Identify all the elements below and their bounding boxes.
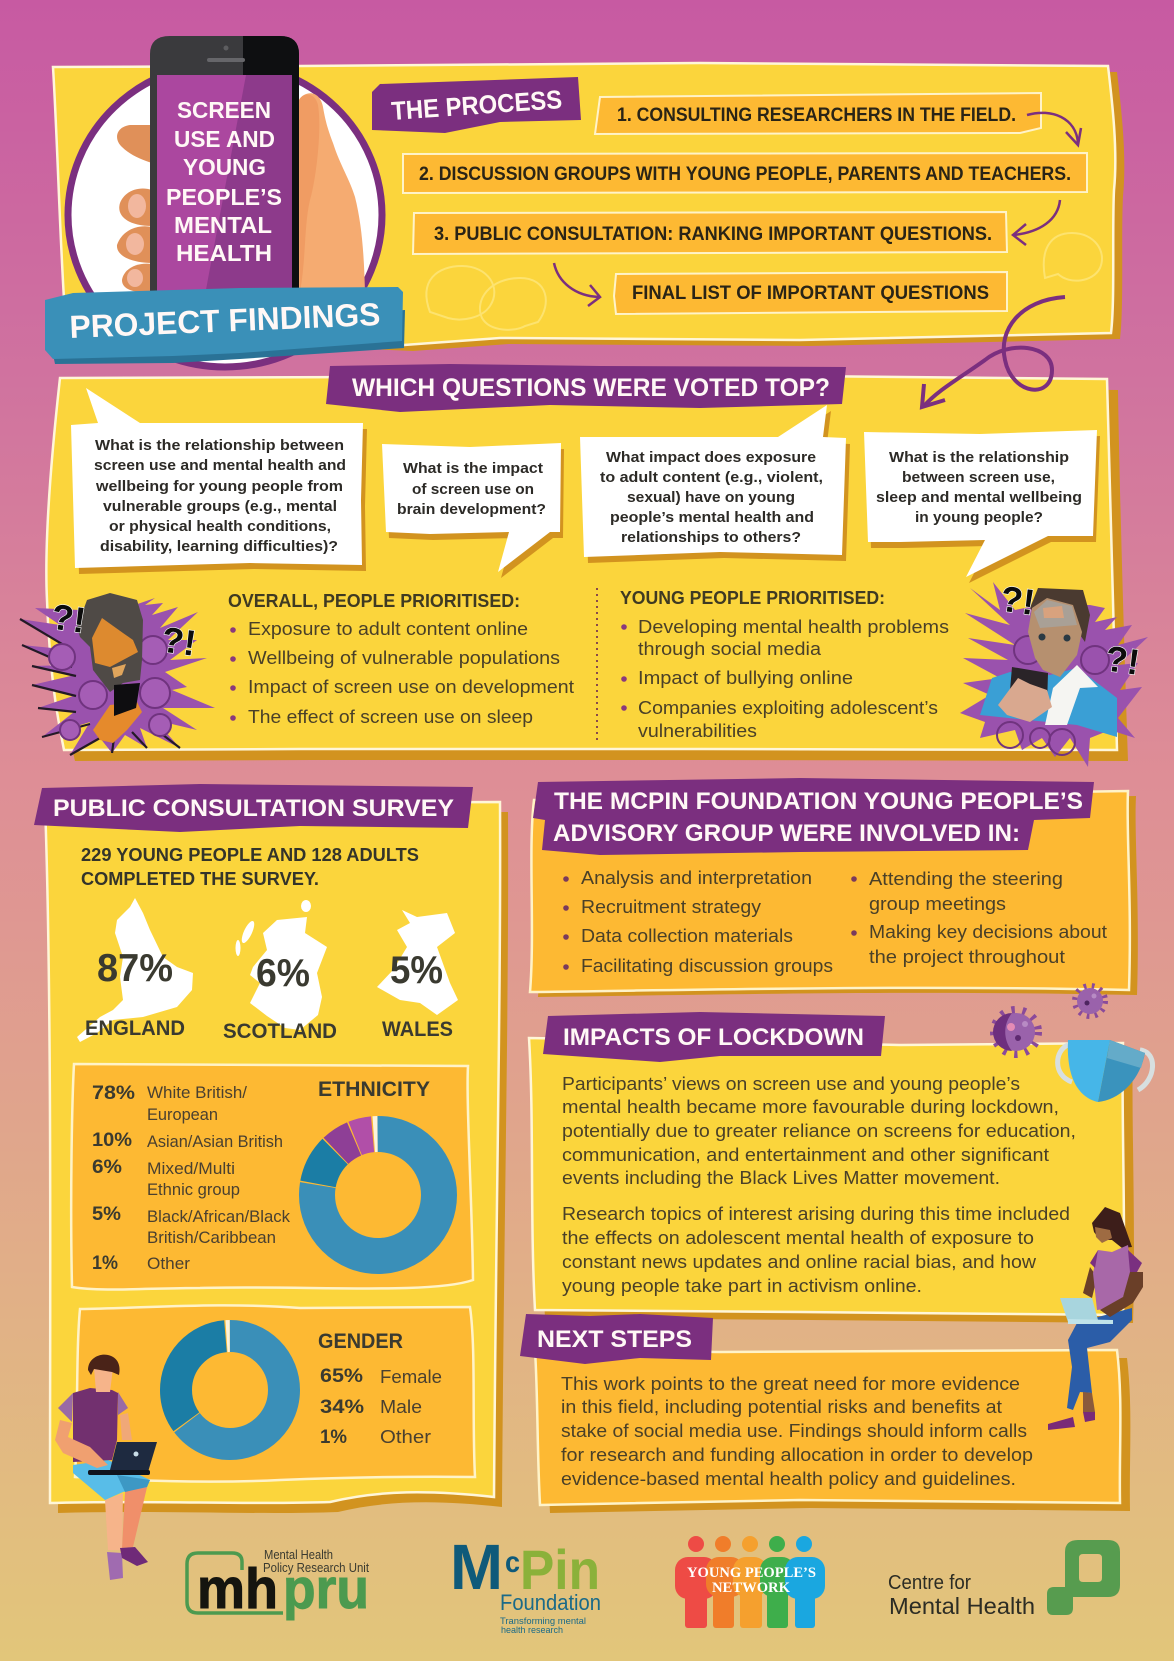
- text: lockdown findings: the effects on adolescent mental health of exposure to: [562, 1227, 1034, 1248]
- ethnicity legend: Black/African/Black: [147, 1208, 291, 1226]
- step 3: 3. PUBLIC CONSULTATION: RANKING IMPORTANT QUESTIONS.: [434, 224, 992, 245]
- illustration: shocked woman with phone: [960, 582, 1148, 767]
- text: lockdown findings: potentially due to greater reliance on screens for education,: [562, 1120, 1076, 1141]
- text: next steps: stake of social media use. Findings should inform calls: [561, 1420, 1027, 1441]
- heading: next steps: [520, 1314, 713, 1364]
- step 2: [403, 153, 1087, 193]
- text: lockdown findings: constant news updates and online racial bias, and how: [562, 1251, 1037, 1272]
- list: young people priorities: Developing mental health problems: [638, 616, 949, 637]
- speech bubble: brain development: What is the impact: [403, 460, 543, 477]
- ethnicity legend: 78%: [92, 1083, 135, 1104]
- question marks left: ?!: [49, 596, 88, 641]
- logo: mcpin foundation: M: [450, 1531, 503, 1603]
- text: next steps: This work points to the great need for more evidence: [561, 1373, 1020, 1394]
- list: young people priorities: vulnerabilities: [638, 720, 757, 741]
- speech bubble: brain development: of screen use on: [412, 481, 534, 498]
- text: next steps: [561, 1373, 1033, 1489]
- title: MENTAL: [174, 212, 272, 238]
- panel: the process: [53, 63, 1124, 351]
- heading: public consultation survey: PUBLIC CONSULTATION SURVEY: [53, 795, 454, 822]
- illustration: phone held in hand: [68, 36, 382, 367]
- list: young people priorities: [621, 616, 949, 741]
- logo: mcpin foundation: Foundation: [500, 1590, 601, 1615]
- text: survey respondents: 229 YOUNG PEOPLE AND 128 ADULTS: [81, 845, 419, 865]
- icon: face mask: [1058, 1040, 1153, 1102]
- map: england: 87%: [97, 947, 173, 990]
- list: advisory group left: Facilitating discussion groups: [581, 955, 833, 976]
- list: advisory group left: [563, 867, 833, 976]
- map: scotland: [223, 900, 337, 1043]
- logo: mhpru: Policy Research Unit: [263, 1561, 369, 1575]
- speech bubble: vulnerable groups: screen use and mental health and: [94, 457, 346, 474]
- text: lockdown findings: Participants’ views on screen use and young people’s: [562, 1073, 1020, 1094]
- heading: advisory group: [533, 778, 1094, 855]
- text: survey respondents: [81, 845, 419, 889]
- final list: FINAL LIST OF IMPORTANT QUESTIONS: [632, 283, 989, 304]
- map: england: ENGLAND: [85, 1017, 185, 1040]
- text: lockdown findings: communication, and entertainment and other significant: [562, 1144, 1049, 1165]
- final list: [614, 272, 1007, 314]
- ethnicity legend: White British/: [147, 1084, 247, 1102]
- list: advisory group left: Data collection materials: [581, 925, 793, 946]
- logo: young people's network: [675, 1536, 825, 1628]
- gender legend: Male: [380, 1397, 422, 1417]
- donut chart: ethnicity: [317, 1134, 439, 1256]
- question marks left: ?!: [159, 619, 199, 664]
- logo: mhpru: Mental Health: [264, 1548, 333, 1562]
- list: advisory group right: Making key decisions about: [869, 921, 1107, 942]
- ethnicity legend: 6%: [92, 1157, 122, 1178]
- panel: public consultation survey: [45, 802, 508, 1513]
- speech bubble: adult content: What impact does exposure: [606, 449, 816, 466]
- speech bubble: adult content: [580, 405, 850, 563]
- text: lockdown findings: young people take part in activism online.: [562, 1275, 922, 1296]
- heading: the process: [372, 77, 581, 133]
- illustration: shocked man with phone: [20, 593, 215, 755]
- panel: impacts of lockdown: [529, 1038, 1134, 1323]
- list: overall priorities: The effect of screen use on sleep: [248, 706, 533, 727]
- step 2: 2. DISCUSSION GROUPS WITH YOUNG PEOPLE, PARENTS AND TEACHERS.: [419, 164, 1071, 185]
- heading: public consultation survey: [34, 784, 473, 832]
- panel: gender: [75, 1305, 475, 1482]
- illustration: man with laptop: [55, 1355, 157, 1580]
- list: overall priorities: Impact of screen use on development: [248, 676, 574, 697]
- panel: ethnicity: [71, 1064, 473, 1290]
- logo: mhpru: [187, 1548, 369, 1621]
- icon: thumb: [299, 93, 365, 292]
- speech bubble: brain development: [382, 443, 564, 578]
- icon: fingers: [117, 125, 152, 293]
- ethnicity legend: Asian/Asian British: [147, 1133, 283, 1151]
- speech bubble: vulnerable groups: or physical health conditions,: [109, 518, 331, 535]
- arrow: step 2 to step 3: [1013, 200, 1060, 245]
- title: PEOPLE’S: [166, 184, 282, 210]
- step 3: [413, 212, 1007, 254]
- logo: mcpin foundation: [450, 1531, 601, 1636]
- logo: young people's network: NETWORK: [712, 1580, 790, 1596]
- list: advisory group left: Recruitment strategy: [581, 896, 762, 917]
- ethnicity legend: 10%: [92, 1130, 132, 1151]
- panel: next steps: [535, 1350, 1130, 1513]
- ethnicity legend: British/Caribbean: [147, 1229, 276, 1247]
- donut chart: gender: [176, 1336, 284, 1444]
- heading: overall priorities: OVERALL, PEOPLE PRIORITISED:: [228, 591, 520, 611]
- heading: which questions were voted top: [326, 364, 846, 412]
- heading: the process: THE PROCESS: [390, 84, 563, 126]
- speech bubble: adult content: people’s mental health and: [610, 509, 814, 526]
- logo: mcpin foundation: Transforming mental: [500, 1616, 586, 1627]
- speech bubble: brain development: brain development?: [397, 501, 546, 518]
- list: advisory group right: Attending the steering: [869, 868, 1063, 889]
- speech bubble: sleep: in young people?: [915, 509, 1043, 526]
- heading: which questions were voted top: WHICH QUESTIONS WERE VOTED TOP?: [352, 374, 830, 402]
- ethnicity legend: [92, 1083, 291, 1274]
- list: young people priorities: Companies exploiting adolescent’s: [638, 697, 938, 718]
- list: advisory group left: Analysis and interpretation: [581, 867, 812, 888]
- speech bubble: vulnerable groups: What is the relationship between: [95, 437, 344, 454]
- illustration: woman with laptop: [1048, 1207, 1143, 1430]
- list: advisory group right: [851, 868, 1107, 967]
- step 1: 1. CONSULTING RESEARCHERS IN THE FIELD.: [617, 105, 1016, 126]
- text: next steps: in this field, including potential risks and benefits at: [561, 1396, 1002, 1417]
- text: survey respondents: COMPLETED THE SURVEY.: [81, 869, 319, 889]
- panel: advisory group: [530, 791, 1138, 997]
- text: next steps: for research and funding allocation in order to develop: [561, 1444, 1033, 1465]
- speech bubble: adult content: relationships to others?: [621, 529, 801, 546]
- heading: ethnicity: ETHNICITY: [318, 1078, 430, 1101]
- heading: advisory group: ADVISORY GROUP WERE INVOLVED IN:: [553, 820, 1020, 847]
- gender legend: Female: [380, 1367, 442, 1387]
- map: wales: WALES: [382, 1018, 453, 1041]
- title: [166, 97, 282, 266]
- logo: mcpin foundation: health research: [501, 1625, 563, 1636]
- heading: advisory group: THE MCPIN FOUNDATION YOUNG PEOPLE’S: [554, 788, 1083, 815]
- question marks right: ?!: [998, 578, 1037, 623]
- heading: impacts of lockdown: [543, 1012, 885, 1062]
- text: next steps: evidence-based mental health policy and guidelines.: [561, 1468, 1016, 1489]
- gender legend: Other: [380, 1427, 431, 1447]
- map: england: [77, 898, 193, 1042]
- speech bubble: adult content: to adult content (e.g., violent,: [600, 469, 823, 486]
- logo: mcpin foundation: c: [505, 1546, 520, 1579]
- logo: young people's network: YOUNG PEOPLE’S: [687, 1565, 816, 1581]
- arrow: process to questions: [922, 297, 1065, 407]
- ethnicity legend: 1%: [92, 1253, 118, 1274]
- text: lockdown findings: Research topics of interest arising during this time included: [562, 1203, 1070, 1224]
- arrow: step 1 to step 2: [1027, 113, 1081, 145]
- step 1: [595, 93, 1041, 134]
- speech bubble: sleep: [864, 430, 1100, 583]
- title: USE AND: [174, 126, 275, 152]
- list: overall priorities: [230, 618, 574, 727]
- logo: centre for mental health: Mental Health: [889, 1593, 1035, 1619]
- gender legend: 34%: [320, 1397, 364, 1418]
- list: overall priorities: Wellbeing of vulnerable populations: [248, 647, 560, 668]
- icon: phone body: [150, 36, 299, 295]
- title: HEALTH: [176, 240, 272, 266]
- question marks right: ?!: [1103, 638, 1142, 683]
- question marks left: [49, 596, 199, 664]
- map: wales: 5%: [390, 949, 443, 992]
- text: lockdown findings: [562, 1073, 1076, 1296]
- banner: project findings: PROJECT FINDINGS: [69, 296, 381, 345]
- text: lockdown findings: events including the Black Lives Matter movement.: [562, 1167, 1000, 1188]
- title: SCREEN: [177, 97, 271, 123]
- circle behind phone: [68, 63, 382, 367]
- logo: centre for mental health: Centre for: [888, 1572, 971, 1594]
- arrow: step 3 to final list: [554, 263, 600, 306]
- ethnicity legend: Ethnic group: [147, 1181, 240, 1199]
- phone screen: [157, 75, 292, 295]
- heading: next steps: NEXT STEPS: [537, 1326, 692, 1353]
- heading: gender: GENDER: [318, 1330, 403, 1353]
- list: advisory group right: group meetings: [869, 893, 1006, 914]
- ethnicity legend: Other: [147, 1255, 191, 1273]
- logo: mhpru: pru: [283, 1557, 369, 1621]
- speech bubble: sleep: sleep and mental wellbeing: [876, 489, 1082, 506]
- map: scotland: 6%: [256, 952, 310, 995]
- list: advisory group right: the project throughout: [869, 946, 1065, 967]
- title: YOUNG: [183, 154, 266, 180]
- text: lockdown findings: mental health became more favourable during lockdown,: [562, 1096, 1059, 1117]
- question marks right: [998, 578, 1142, 683]
- speech bubble: sleep: What is the relationship: [889, 449, 1069, 466]
- speech bubble: vulnerable groups: [71, 388, 367, 574]
- gender legend: [320, 1366, 442, 1448]
- gender legend: 65%: [320, 1366, 363, 1387]
- icon: large virus: [993, 1012, 1036, 1052]
- list: young people priorities: Impact of bullying online: [638, 667, 853, 688]
- list: overall priorities: Exposure to adult content online: [248, 618, 528, 639]
- logo: centre for mental health: [888, 1540, 1120, 1619]
- banner: project findings: [45, 287, 405, 364]
- map: wales: [377, 910, 458, 1041]
- list: young people priorities: through social media: [638, 638, 822, 659]
- speech bubble: adult content: sexual) have on young: [627, 489, 795, 506]
- panel: which questions were voted top: [46, 376, 1128, 761]
- heading: young people priorities: YOUNG PEOPLE PRIORITISED:: [620, 588, 885, 608]
- speech bubble: vulnerable groups: disability, learning difficulties)?: [100, 538, 338, 555]
- ethnicity legend: European: [147, 1106, 218, 1124]
- speech bubble: vulnerable groups: vulnerable groups (e.g., mental: [103, 498, 337, 515]
- icon: small virus: [1076, 987, 1104, 1015]
- heading: impacts of lockdown: IMPACTS OF LOCKDOWN: [563, 1024, 864, 1051]
- decorative speech bubbles: [426, 233, 1102, 330]
- speech bubble: vulnerable groups: wellbeing for young people from: [95, 478, 343, 495]
- gender legend: 1%: [320, 1427, 347, 1448]
- logo: mhpru: mh: [197, 1557, 278, 1621]
- ethnicity legend: Mixed/Multi: [147, 1160, 235, 1178]
- map: scotland: SCOTLAND: [223, 1020, 337, 1043]
- ethnicity legend: 5%: [92, 1204, 121, 1225]
- logo: mcpin foundation: Pin: [520, 1538, 600, 1601]
- speech bubble: sleep: between screen use,: [902, 469, 1055, 486]
